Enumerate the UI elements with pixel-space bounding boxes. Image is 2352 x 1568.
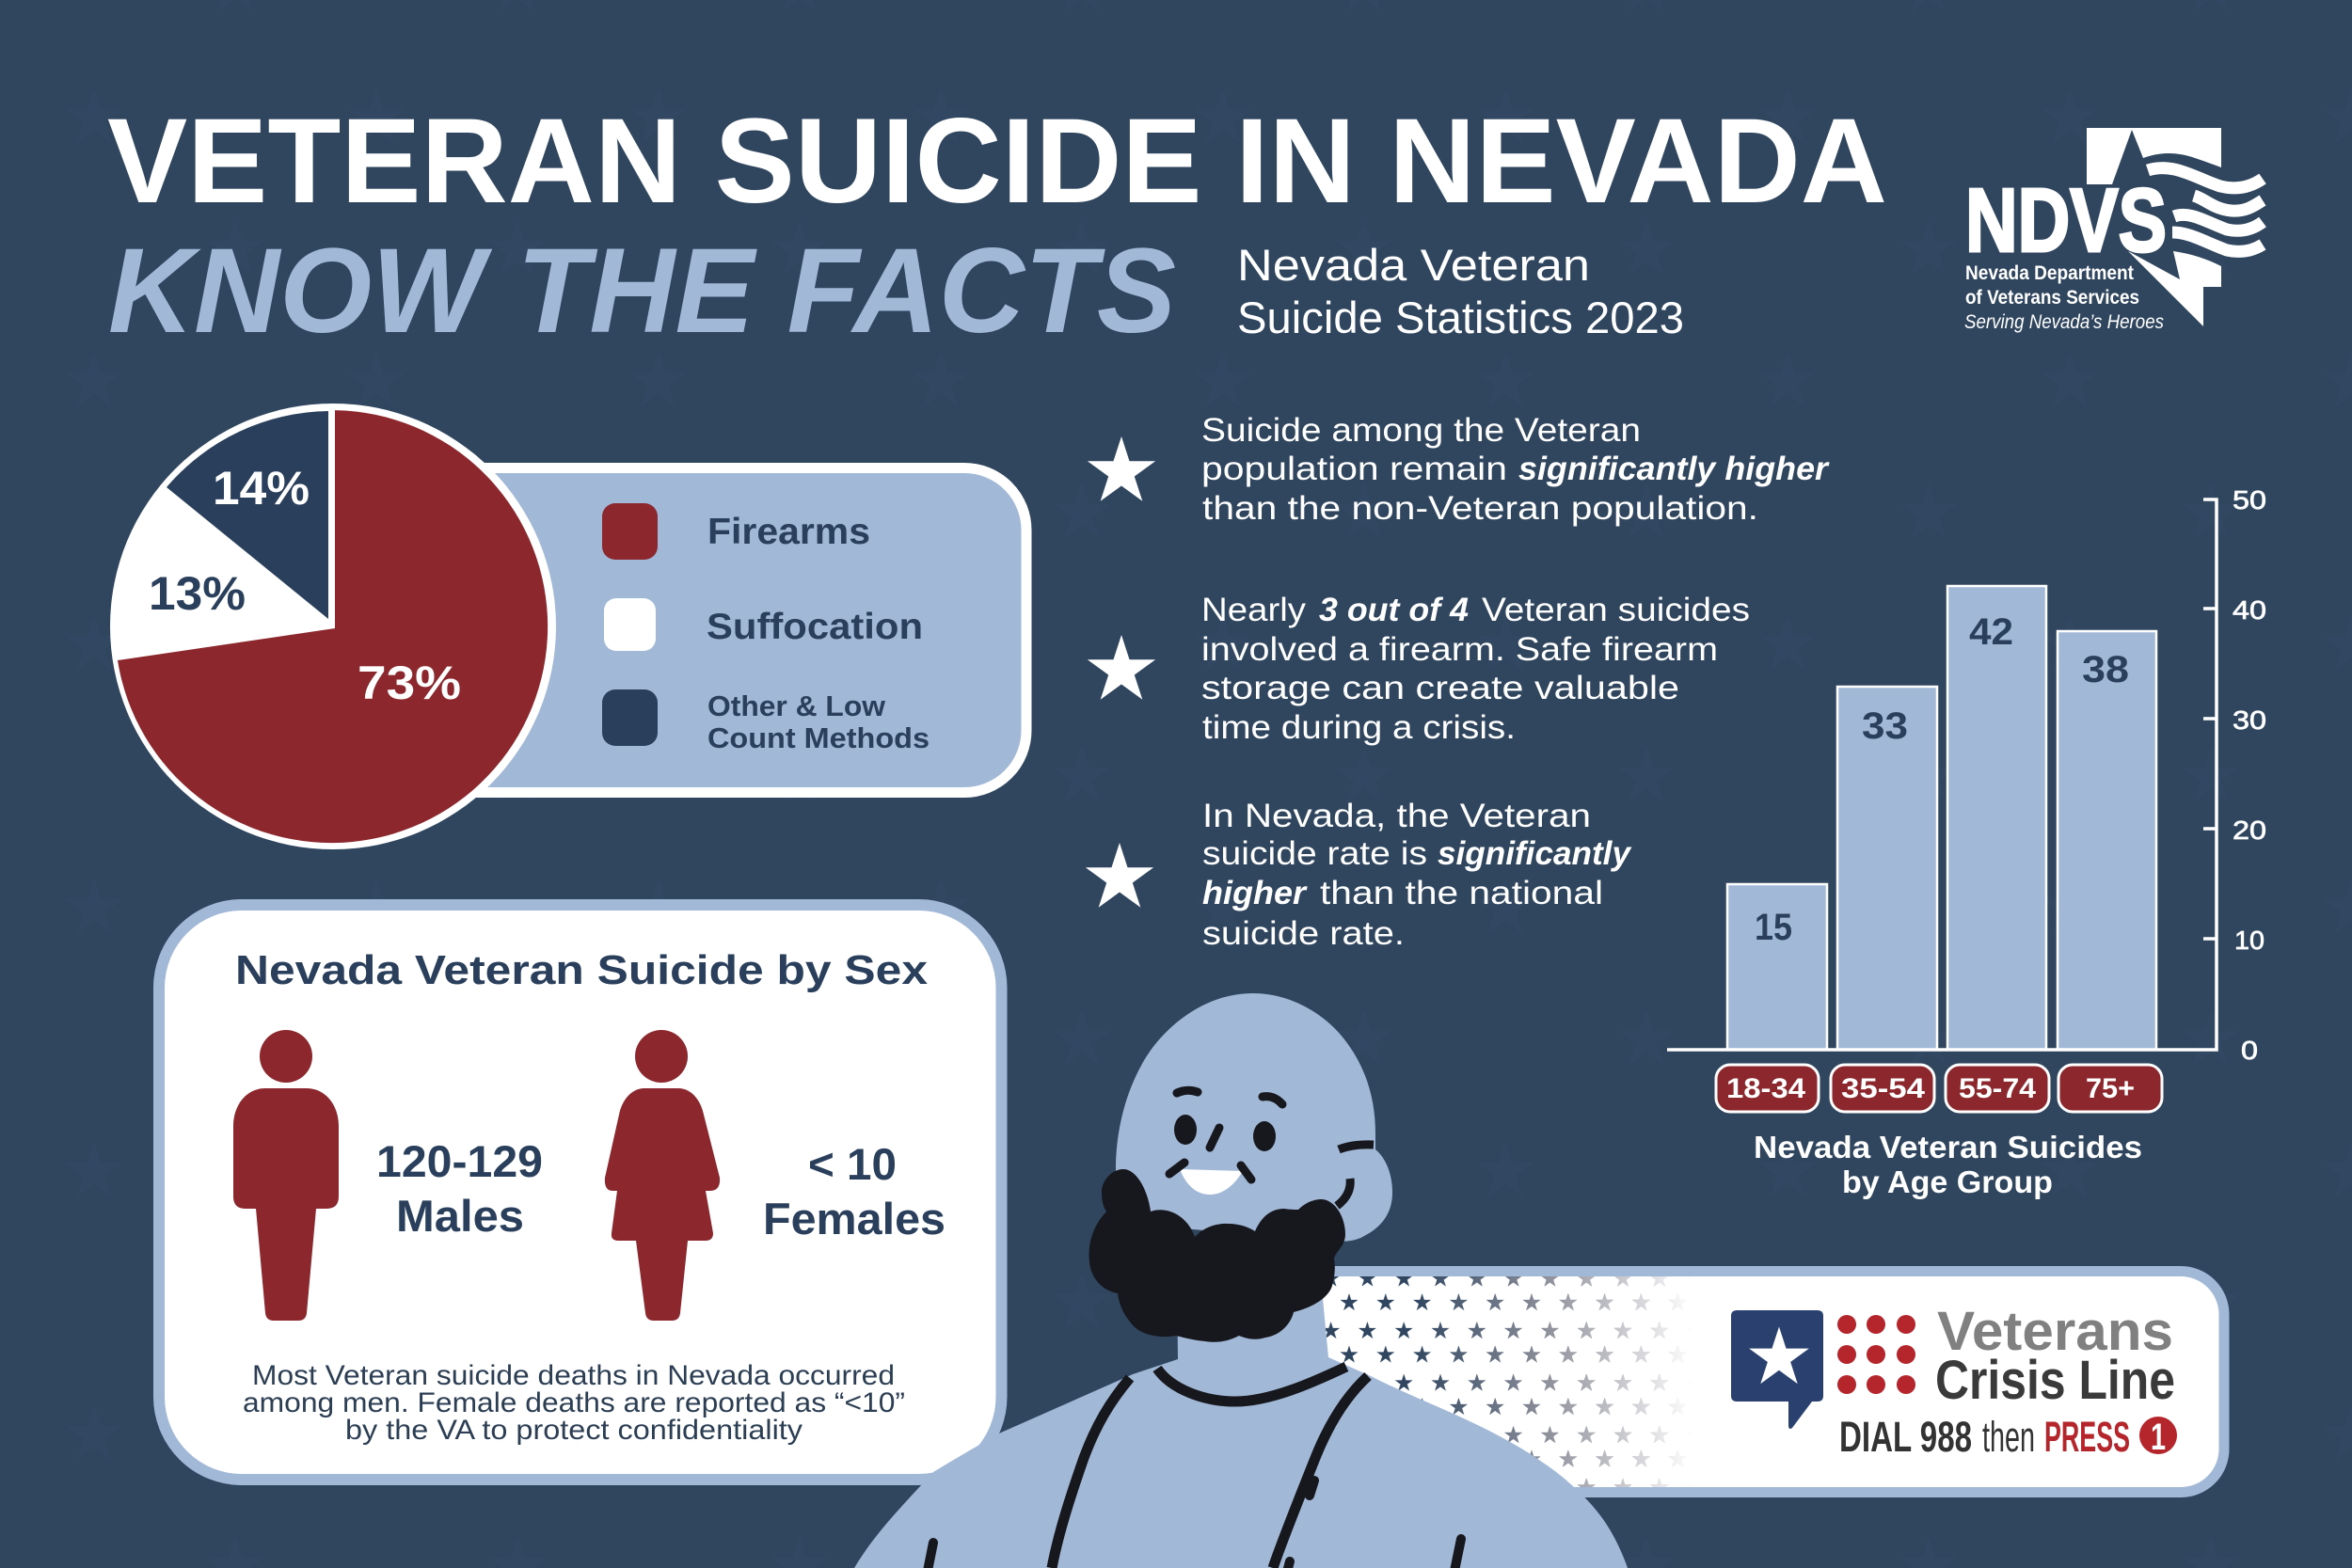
age group pills: 35-54	[1841, 1073, 1925, 1104]
dial instruction: 1	[2151, 1417, 2166, 1458]
legend: other and low count methods: Other & Low	[707, 689, 886, 722]
legend panel	[282, 468, 1026, 792]
legend: other and low count methods: Count Methods	[707, 721, 930, 754]
man body and neck	[854, 1279, 1628, 1568]
man head and ear	[1116, 993, 1392, 1242]
logo lettering: NDVS	[1965, 170, 2167, 271]
female count: < 10	[808, 1139, 897, 1189]
axes	[1667, 499, 2217, 1050]
axis labels: 30	[2233, 705, 2266, 735]
fact 2 text: Nearly	[1201, 592, 1307, 628]
logo department name: Nevada Department	[1965, 262, 2134, 284]
crisis line wordmark	[1935, 1301, 2175, 1411]
subtitle: statistics year: Suicide Statistics 2023	[1237, 293, 1684, 342]
icon: star	[1088, 635, 1155, 700]
bars	[1727, 586, 2156, 1050]
dial instruction	[1839, 1413, 2177, 1461]
dial instruction: then	[1982, 1413, 2035, 1461]
crisis line wordmark: Veterans	[1937, 1301, 2173, 1362]
bar values: 38	[2082, 649, 2129, 690]
man mouth	[1180, 1169, 1243, 1195]
fact 2 text: storage can create valuable	[1201, 670, 1679, 706]
fact 2 text	[1201, 592, 1750, 746]
subtitle: statistics year	[1237, 240, 1684, 342]
man face lines	[1169, 1090, 1374, 1206]
fact 3 text: In Nevada, the Veteran	[1202, 798, 1591, 834]
fact 1 text: population remain	[1201, 451, 1507, 487]
fact 1 text: Suicide among the Veteran	[1201, 412, 1641, 449]
icon: speech bubble star	[1731, 1310, 1823, 1429]
logo department name	[1964, 262, 2164, 333]
legend: firearms	[602, 503, 870, 560]
axis labels	[2233, 485, 2266, 1065]
male count: Males	[396, 1191, 524, 1241]
panel: suicide methods pie and legend	[110, 404, 1026, 849]
fact 1	[1088, 412, 1830, 527]
fact 2	[1088, 592, 1750, 746]
fact 3	[1086, 798, 1632, 952]
bar values: 15	[1755, 907, 1792, 948]
icon: female figure	[605, 1030, 720, 1321]
bar chart: suicides by age group	[1667, 485, 2266, 1199]
axis labels: 10	[2234, 926, 2265, 955]
male count	[376, 1136, 543, 1241]
fact 3 text: significantly	[1438, 835, 1632, 872]
female count: Females	[763, 1194, 946, 1243]
logo department name: Serving Nevada’s Heroes	[1964, 311, 2164, 333]
panel: suicide by sex	[159, 905, 1001, 1480]
man collar and suspenders	[1052, 1367, 1368, 1568]
panel note: among men. Female deaths are reported as “<10”	[243, 1387, 905, 1418]
logo flag waves	[2148, 168, 2263, 251]
bar values: 33	[1862, 705, 1908, 747]
fact 3 text: higher	[1202, 875, 1308, 911]
pie labels: 14%	[213, 462, 310, 515]
fact 3 text: suicide rate.	[1202, 915, 1405, 952]
pie labels	[149, 462, 461, 709]
fact 2 text: involved a firearm. Safe firearm	[1201, 631, 1718, 668]
subtitle: statistics year: Nevada Veteran	[1237, 240, 1590, 290]
illustration: bearded man	[854, 993, 1628, 1568]
age group pills	[1716, 1065, 2162, 1112]
legend: suffocation	[604, 598, 923, 651]
age group pills: 55-74	[1959, 1073, 2036, 1104]
dial instruction: DIAL 988	[1839, 1413, 1972, 1461]
fact 2 text: 3 out of 4	[1319, 592, 1469, 628]
panel: veterans crisis line	[1223, 1272, 2224, 1492]
title: VETERAN SUICIDE IN NEVADA	[107, 94, 1887, 229]
logo department name: of Veterans Services	[1965, 287, 2139, 309]
chart caption: by Age Group	[1842, 1164, 2053, 1199]
logo state shape	[2087, 128, 2221, 326]
man shirt details	[927, 1481, 1461, 1568]
fact 3 text: than the national	[1320, 875, 1603, 911]
legend: suffocation: Suffocation	[707, 607, 923, 647]
subtitle: know the facts: KNOW THE FACTS	[108, 224, 1176, 358]
panel heading: Nevada Veteran Suicide by Sex	[235, 947, 929, 993]
legend: other and low count methods	[602, 689, 930, 754]
axis labels: 20	[2233, 816, 2266, 845]
pie slice: firearms 73%	[118, 410, 548, 843]
bar values: 42	[1969, 611, 2013, 653]
crisis line wordmark: Crisis Line	[1935, 1350, 2175, 1411]
panel note	[243, 1360, 905, 1446]
dial instruction: PRESS	[2044, 1413, 2130, 1461]
axis labels: 40	[2233, 595, 2266, 625]
star pattern	[1317, 1276, 1712, 1487]
panel note: Most Veteran suicide deaths in Nevada occurred	[252, 1360, 895, 1391]
icon: star	[1088, 436, 1155, 501]
chart caption: Nevada Veteran Suicides	[1754, 1130, 2142, 1164]
panel note: by the VA to protect confidentiality	[345, 1415, 803, 1446]
fact 1 text: than the non-Veteran population.	[1202, 490, 1758, 527]
male count: 120-129	[376, 1136, 543, 1186]
age group pills: 18-34	[1726, 1073, 1805, 1104]
axis labels: 0	[2241, 1036, 2258, 1065]
pie labels: 73%	[358, 657, 461, 709]
icon: star	[1086, 843, 1153, 908]
fact 1 text	[1201, 412, 1830, 527]
fact 3 text: suicide rate is	[1202, 835, 1427, 872]
logo: NDVS	[1964, 128, 2263, 333]
fact 2 text: Veteran suicides	[1482, 592, 1750, 628]
age group pills: 75+	[2086, 1073, 2135, 1104]
fact 2 text: time during a crisis.	[1202, 709, 1516, 746]
fact 1 text: significantly higher	[1518, 451, 1830, 487]
man eyes	[1174, 1115, 1276, 1151]
pie slice: other 14%	[167, 411, 328, 619]
pie chart	[110, 404, 556, 849]
legend: firearms: Firearms	[707, 512, 870, 552]
axis labels: 50	[2233, 485, 2266, 515]
bar values	[1755, 611, 2129, 948]
man beard	[1089, 1169, 1345, 1342]
pie labels: 13%	[149, 567, 246, 620]
icon: keypad dots	[1837, 1315, 1915, 1394]
fact 3 text	[1202, 798, 1632, 952]
chart caption	[1754, 1130, 2142, 1199]
female count	[763, 1139, 946, 1243]
icon: male figure	[233, 1030, 339, 1321]
